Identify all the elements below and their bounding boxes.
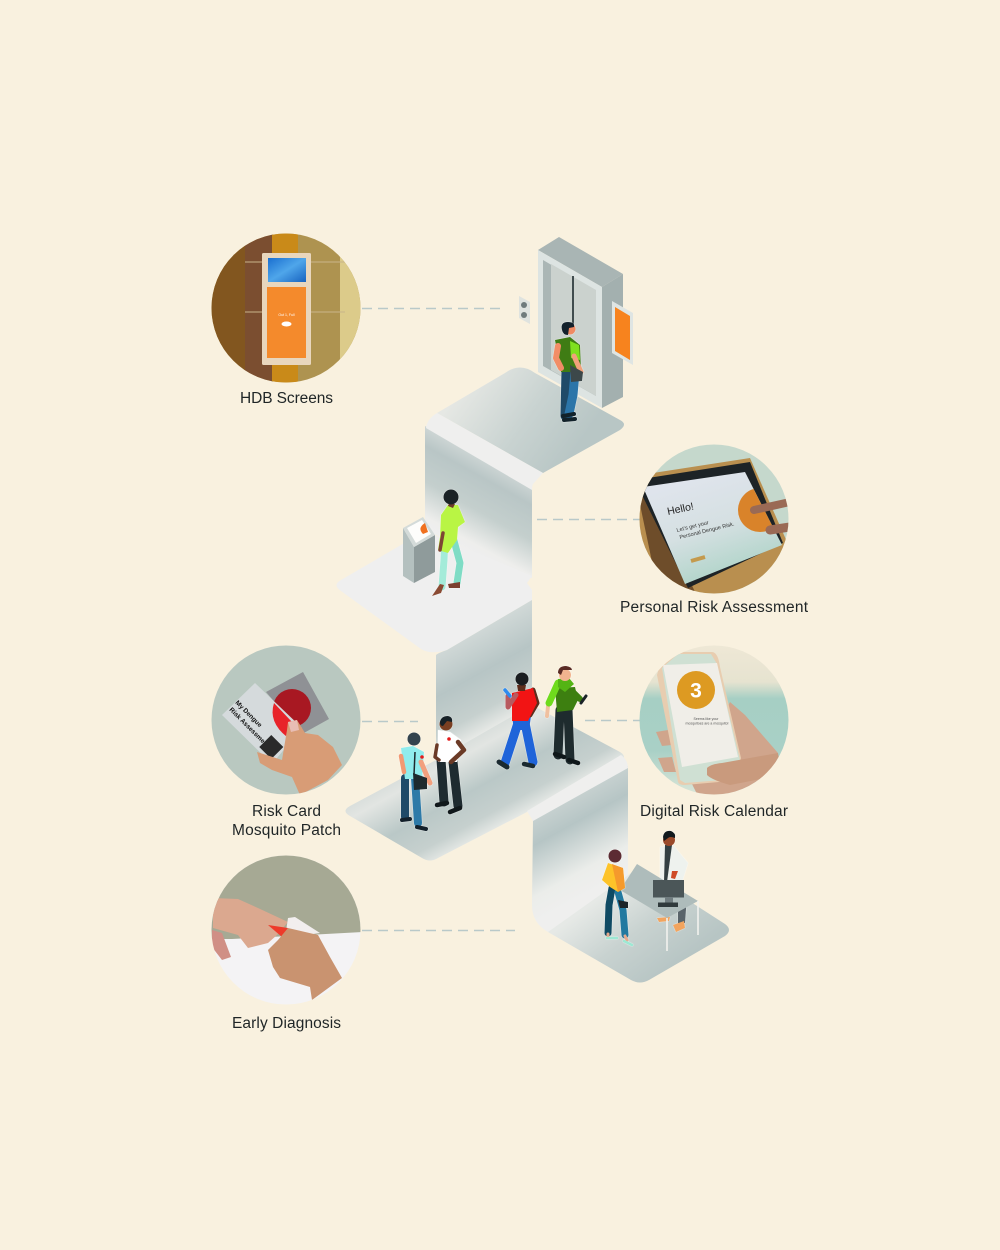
elevator buttons (519, 296, 530, 324)
label: Early Diagnosis: Early Diagnosis (232, 1015, 341, 1032)
phone (657, 652, 741, 785)
band 2 (527, 755, 628, 821)
table (620, 864, 698, 951)
wall 2 (436, 600, 532, 765)
tablet screen: Hello! (666, 501, 695, 518)
label: Digital Risk Calendar: Digital Risk Calendar (640, 803, 788, 820)
person: man in white shirt (435, 716, 464, 812)
elevator (519, 237, 633, 408)
thumb (707, 753, 782, 785)
screen panel: Out 1, Full (278, 313, 295, 317)
person: woman at kiosk (432, 490, 465, 596)
label: Risk Card / Mosquito Patch: Risk Card (252, 803, 321, 820)
risk card (222, 683, 302, 764)
kiosk (403, 517, 435, 583)
label: Personal Risk Assessment: Personal Risk Assessment (620, 599, 809, 616)
connector lines (362, 308, 640, 930)
finger (754, 502, 790, 510)
person: man at elevator (555, 322, 583, 420)
left fingers (212, 930, 231, 960)
person: man in green hoodie (547, 666, 586, 763)
photo: personal risk assessment tablet (640, 444, 788, 594)
hand (257, 720, 342, 795)
phone: Seems like your (694, 717, 719, 721)
lift side screen (612, 301, 633, 365)
person: woman in yellow jacket (602, 850, 632, 945)
monitor (653, 880, 684, 907)
upper hand (213, 898, 288, 948)
wall 3 (532, 766, 640, 932)
person: man in red shirt (499, 672, 537, 767)
risk card: Risk Assessment (228, 706, 271, 750)
tablet screen: Let's get your (676, 520, 710, 534)
wall 1 (425, 426, 532, 578)
platform 4 (548, 868, 729, 982)
photo: digital risk calendar phone (638, 644, 790, 800)
phone: 3 (690, 680, 702, 702)
isometric stepped ribbon path (336, 368, 729, 982)
clinic desk and doctor (620, 831, 698, 951)
screen panel (262, 253, 311, 365)
card (286, 917, 320, 934)
hand back (690, 702, 778, 800)
tablet screen (643, 472, 782, 584)
phone: mosquitoes are a mosquito! (686, 722, 729, 726)
band 1 (426, 413, 543, 490)
doctor (657, 831, 688, 932)
photo: early diagnosis hands (210, 854, 362, 1006)
risk card: My Dengue (234, 699, 263, 729)
photo: HDB screen (210, 232, 362, 384)
photo: risk card and patch (210, 644, 362, 796)
label: Risk Card / Mosquito Patch (232, 803, 341, 839)
tablet screen: Personal Dengue Risk. (679, 521, 736, 541)
platform 1 (437, 368, 624, 473)
platform 3 (346, 705, 624, 860)
label: Risk Card / Mosquito Patch: Mosquito Patch (232, 822, 341, 839)
person: man in teal shirt (401, 732, 430, 829)
label: HDB Screens: HDB Screens (240, 390, 333, 407)
lower hand (268, 928, 342, 1000)
platform 2 (336, 531, 532, 652)
